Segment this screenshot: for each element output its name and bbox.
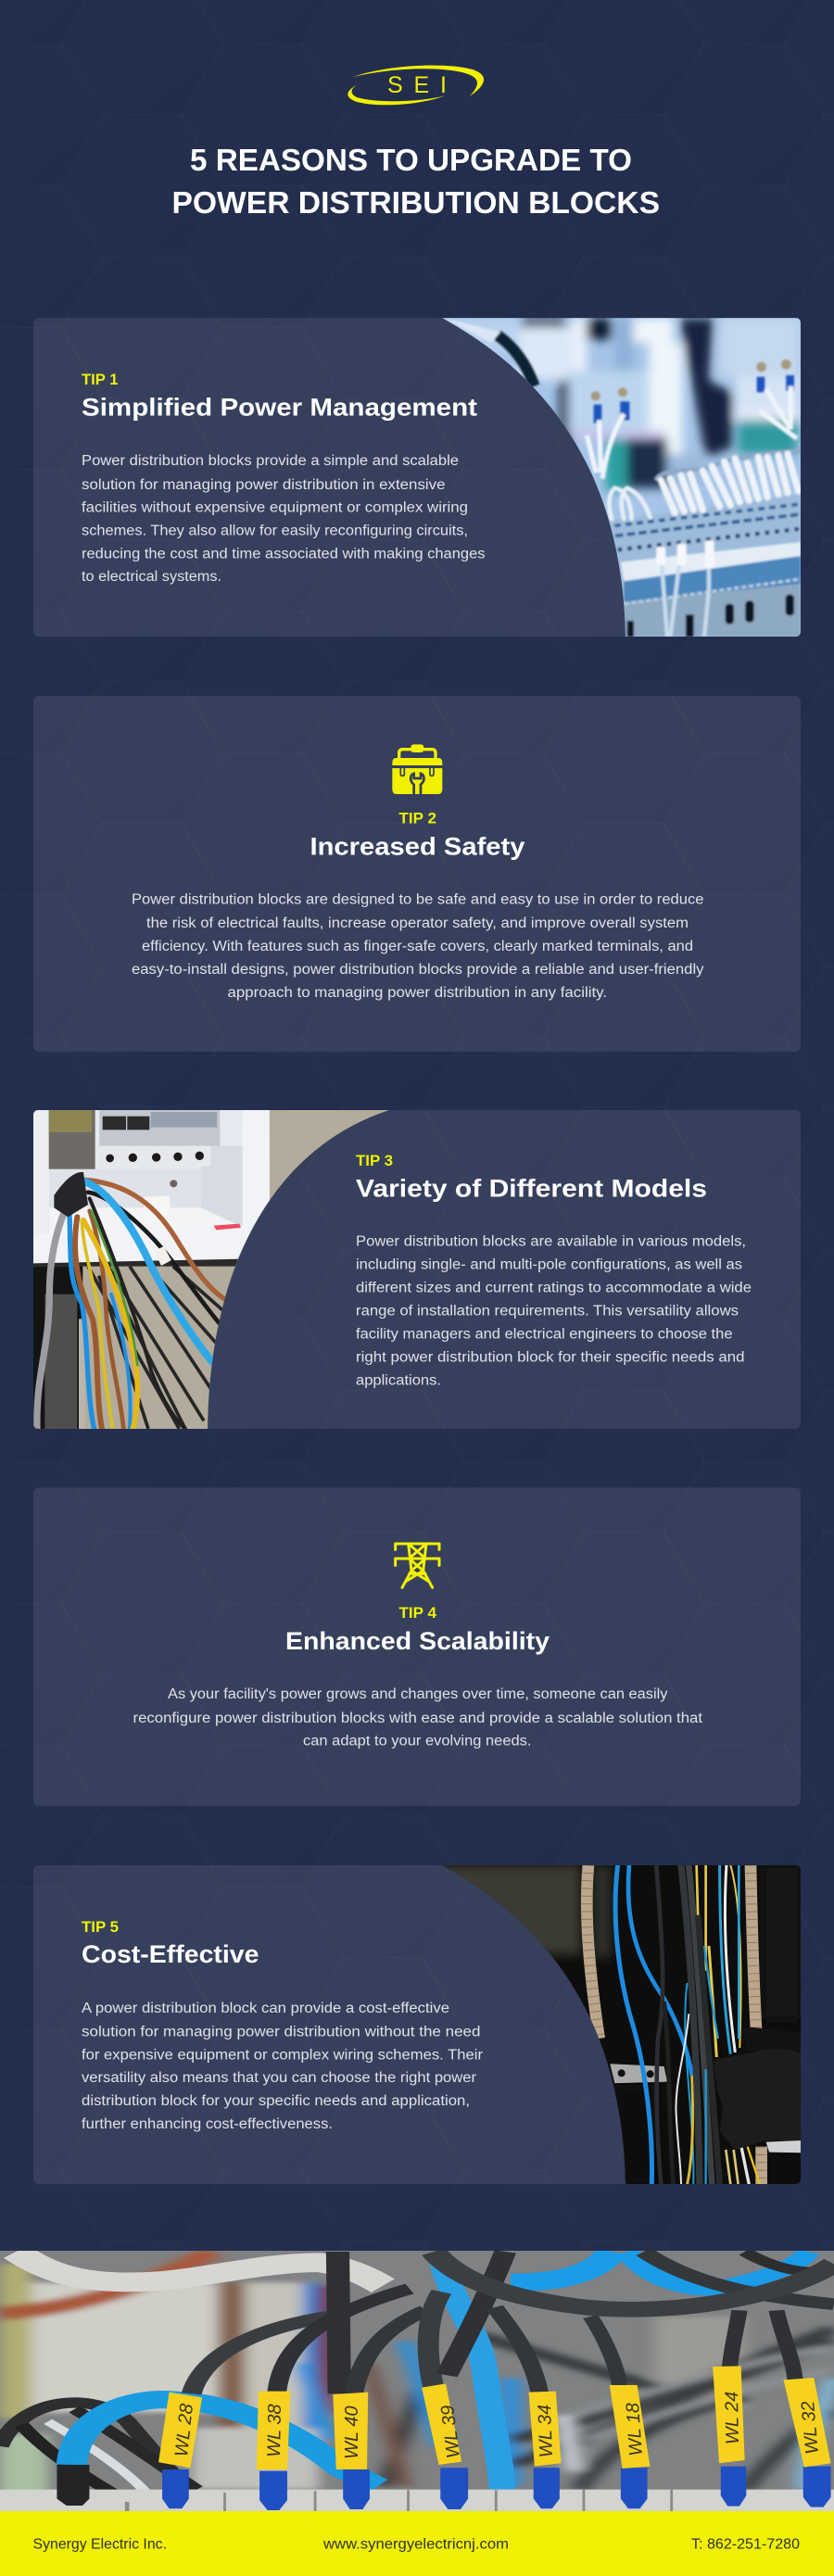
photo: terminal blocks and wiring [426, 318, 801, 637]
text block: tip 1: facilities without expensive equipment or complex wiring [82, 500, 468, 515]
text block: tip 5: for expensive equipment or complex wiring schemes. Their [82, 2048, 483, 2063]
text block: tip 3 [356, 1234, 752, 1388]
text block: tip 4: reconfigure power distribution blocks with ease and provide a scalable solution that [133, 1711, 703, 1726]
text block: tip 5 [82, 2001, 483, 2132]
text block: tip 3: range of installation requirements. This versatility allows [356, 1303, 739, 1320]
text block: tip 2: approach to managing power distribution in any facility. [228, 985, 607, 1001]
photo: labelled wires on terminal strip [0, 2251, 834, 2512]
heading: tip 2: Increased Safety [310, 832, 524, 860]
panel: tip 1 [33, 318, 801, 637]
panel: tip 2 [33, 696, 801, 1052]
text block: tip 1: schemes. They also allow for easily reconfiguring circuits, [82, 523, 468, 539]
text: tip 1 label: TIP 1 [82, 371, 119, 388]
footer bar [0, 2511, 834, 2576]
text block: tip 2 [132, 891, 704, 1001]
wire label texts: WL 39 [437, 2404, 464, 2459]
text block: tip 3: facility managers and electrical engineers to choose the [356, 1327, 732, 1342]
text block: tip 2: Power distribution blocks are designed to be safe and easy to use in order to reduce [132, 891, 704, 908]
heading: tip 4: Enhanced Scalability [285, 1627, 550, 1655]
text: tip 4 label: TIP 4 [398, 1604, 437, 1622]
text: tip 3 label: TIP 3 [356, 1152, 393, 1169]
title: POWER DISTRIBUTION BLOCKS [172, 185, 660, 220]
text block: tip 5: versatility also means that you can choose the right power [82, 2070, 476, 2086]
logo: SEI: SEI [387, 72, 447, 98]
text block: tip 2: easy-to-install designs, power distribution blocks provide a reliable and user-friendly [132, 962, 704, 978]
text block: tip 1 [82, 453, 486, 585]
text block: tip 2: the risk of electrical faults, increase operator safety, and improve overall system [146, 915, 689, 931]
photo: bundled wires and gloved hand [426, 1865, 801, 2184]
icon: power transmission tower [396, 1544, 439, 1587]
wire label texts: WL 28 [171, 2403, 197, 2458]
wire label texts: WL 32 [798, 2400, 823, 2455]
heading: tip 5: Cost-Effective [82, 1940, 259, 1968]
panel: tip 5 [33, 1865, 801, 2184]
text block: tip 1: reducing the cost and time associated with making changes [82, 547, 486, 562]
logo: SEI [348, 65, 484, 105]
wire label texts: WL 40 [342, 2406, 362, 2459]
text block: tip 5: solution for managing power distribution without the need [82, 2024, 480, 2040]
text block: tip 1: solution for managing power distribution in extensive [82, 477, 445, 493]
text block: tip 2: efficiency. With features such as finger-safe covers, clearly marked terminals, and [142, 939, 693, 954]
title [172, 143, 660, 220]
text block: tip 3: Power distribution blocks are available in various models, [356, 1234, 746, 1249]
text block: tip 4: As your facility's power grows and changes over time, someone can easily [168, 1686, 668, 1702]
text block: tip 4 [133, 1686, 703, 1749]
text block: tip 1: to electrical systems. [82, 569, 221, 585]
text block: tip 3: different sizes and current ratings to accommodate a wide [356, 1281, 752, 1295]
title: 5 REASONS TO UPGRADE TO [190, 143, 632, 177]
text: tip 2 label: TIP 2 [398, 810, 436, 827]
footer: website: www.synergyelectricnj.com [322, 2537, 509, 2552]
footer: phone: T: 862-251-7280 [691, 2537, 800, 2552]
text block: tip 3: including single- and multi-pole configurations, as well as [356, 1256, 742, 1273]
text block: tip 5: distribution block for your specific needs and application, [82, 2093, 470, 2109]
heading: tip 3: Variety of Different Models [356, 1175, 707, 1203]
text block: tip 4: can adapt to your evolving needs. [303, 1733, 532, 1749]
text block: tip 1: Power distribution blocks provide a simple and scalable [82, 453, 459, 469]
wire label texts: WL 38 [264, 2404, 285, 2457]
icon: toolbox with wrench [392, 744, 442, 794]
wire label texts: WL 18 [623, 2402, 647, 2456]
panel: tip 3 [31, 1109, 801, 1430]
panel: tip 4 [33, 1488, 801, 1806]
wire label texts: WL 24 [722, 2391, 743, 2444]
wire label texts [171, 2391, 823, 2459]
footer: company name: Synergy Electric Inc. [33, 2537, 167, 2552]
text block: tip 5: further enhancing cost-effectiveness. [82, 2116, 333, 2132]
text block: tip 5: A power distribution block can provide a cost-effective [82, 2001, 449, 2016]
heading: tip 1: Simplified Power Management [82, 393, 477, 421]
text block: tip 3: right power distribution block for their specific needs and [356, 1349, 745, 1366]
photo: breaker box with coloured wires [31, 1109, 401, 1430]
text: tip 5 label: TIP 5 [82, 1918, 119, 1936]
text block: tip 3: applications. [356, 1373, 441, 1388]
wire label texts: WL 34 [535, 2404, 557, 2458]
